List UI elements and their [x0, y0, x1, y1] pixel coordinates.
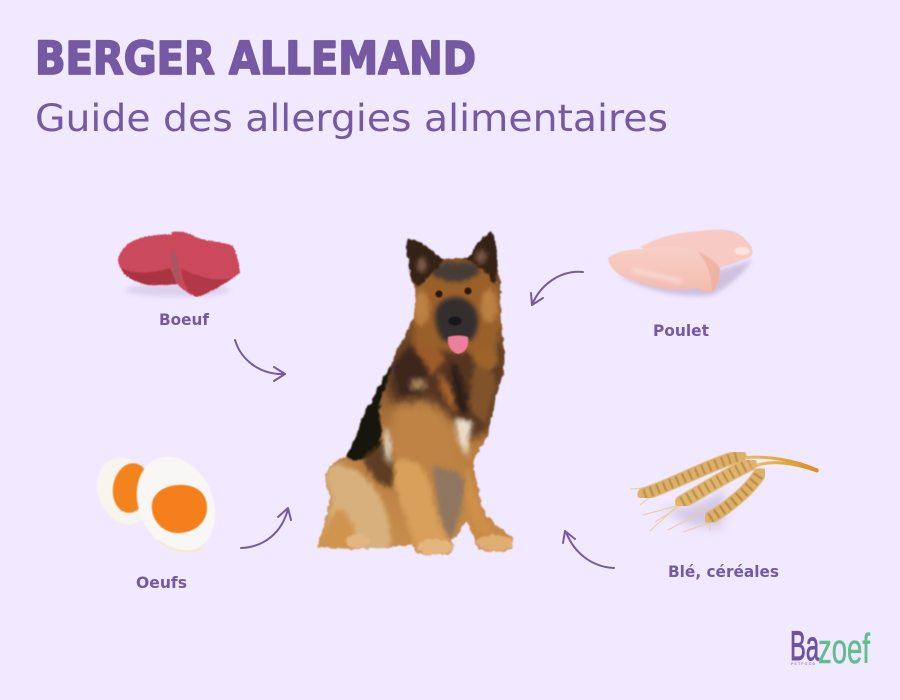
dog neck and mane	[385, 340, 505, 440]
image: wheat ears	[630, 456, 817, 532]
title: BERGER ALLEMAND	[35, 32, 476, 85]
label: Oeufs: Oeufs	[136, 573, 187, 592]
logo text: Ba: Ba	[790, 622, 819, 669]
arrow: chicken to dog	[531, 272, 583, 305]
dog haunch shadow	[362, 440, 395, 490]
dog tongue	[448, 336, 468, 354]
dog left neck shadow	[392, 345, 428, 395]
dog muzzle	[435, 297, 478, 341]
dog belly grey	[433, 465, 465, 540]
arrow: wheat to dog	[563, 531, 614, 568]
dog base coat	[310, 225, 520, 560]
panel: wheat allergen	[563, 456, 817, 581]
image: beef steaks	[118, 232, 240, 297]
image: chicken breasts	[608, 230, 753, 296]
label: Blé, céréales: Blé, céréales	[668, 562, 779, 581]
dog nose	[448, 316, 462, 326]
arrow: beef to dog	[235, 340, 285, 381]
panel: eggs allergen	[87, 444, 291, 592]
dog face	[435, 288, 478, 354]
dog forehead	[428, 262, 482, 282]
ear: middle	[682, 464, 750, 502]
dog rear fur	[318, 464, 390, 550]
dog ears	[404, 236, 444, 288]
dog chest light patches	[455, 419, 473, 458]
image: boiled eggs	[87, 444, 230, 564]
dog front legs	[395, 459, 452, 554]
subtitle: Guide des allergies alimentaires	[35, 97, 668, 140]
ear: lower	[710, 473, 760, 518]
illustration: German Shepherd dog	[310, 225, 520, 560]
logo tagline: PETFOOD	[791, 662, 815, 666]
dog cheeks	[413, 291, 429, 325]
dog paws	[417, 539, 453, 555]
panel: beef allergen	[118, 232, 285, 381]
stems	[740, 457, 817, 471]
ear: top	[644, 456, 740, 494]
panel: chicken allergen	[531, 230, 753, 340]
label: Poulet: Poulet	[653, 321, 709, 340]
logo text: zoef: zoef	[818, 625, 870, 672]
dog tan shoulder	[378, 394, 456, 440]
dog black back	[347, 366, 391, 460]
dog dark chest line	[451, 362, 468, 414]
dog eyes	[436, 290, 442, 298]
label: Boeuf: Boeuf	[159, 310, 210, 329]
dog right chest	[470, 367, 497, 425]
dog orange chest streak	[438, 372, 457, 412]
logo: Bazoef	[790, 622, 870, 672]
awns	[630, 487, 712, 532]
arrow: eggs to dog	[241, 508, 291, 548]
dog head	[411, 258, 502, 352]
